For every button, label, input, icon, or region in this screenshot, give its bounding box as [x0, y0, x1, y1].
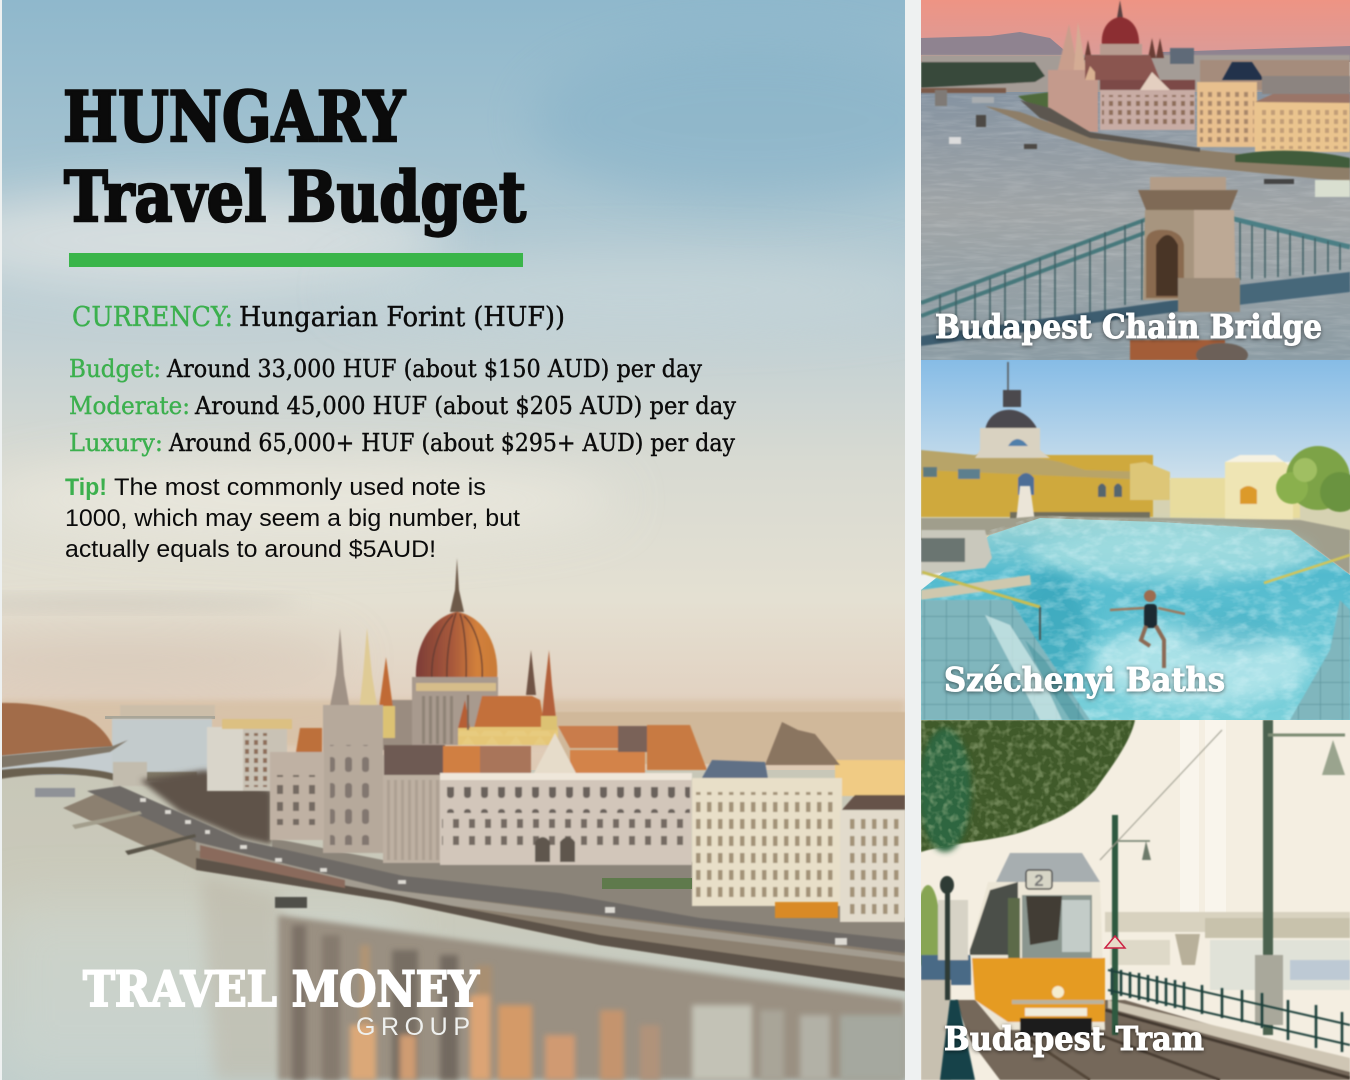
- moderate row: Moderate:: [69, 391, 190, 420]
- left towers and wings: [323, 705, 383, 853]
- yellow bath building: [921, 450, 1170, 520]
- roof: [479, 745, 532, 774]
- jetties: [35, 788, 307, 908]
- riverside buildings: [1197, 62, 1350, 152]
- left small tree and street: [916, 885, 971, 1080]
- budget row: Budget:: [69, 354, 161, 383]
- label: Széchenyi Baths: Széchenyi Baths: [944, 660, 1225, 699]
- warning sign: [1105, 936, 1125, 948]
- dark trees behind embankment: [140, 770, 272, 845]
- moderate row: Around 45,000 HUF (about $205 AUD) per day: [194, 391, 736, 420]
- track bed: [955, 1000, 1350, 1080]
- panel: main photo of Hungarian Parliament on the Danube: [0, 0, 970, 1080]
- far bank edge: [0, 740, 128, 768]
- tip text block: actually equals to around $5AUD!: [65, 536, 436, 563]
- mountains: [921, 32, 1350, 62]
- budget row: Around 33,000 HUF (about $150 AUD) per day: [166, 354, 702, 383]
- Parliament building: [270, 558, 707, 865]
- currency heading: Hungarian Forint (HUF)): [239, 302, 565, 333]
- embankment and road: [63, 786, 905, 991]
- bridge cables and deck: [921, 215, 1350, 346]
- dome: [416, 612, 497, 680]
- title: HUNGARY: [63, 77, 406, 158]
- park lawn: [602, 878, 692, 889]
- overpass: [1105, 912, 1350, 990]
- luxury row: Around 65,000+ HUF (about $295+ AUD) per day: [168, 428, 735, 457]
- teal hedge: [940, 1000, 975, 1080]
- water reflections: [200, 875, 905, 1080]
- yellow tram: [775, 902, 838, 918]
- iron fence: [1108, 968, 1350, 1052]
- arched entrance: [535, 837, 575, 862]
- central spire: [450, 558, 464, 612]
- statue: [1016, 486, 1035, 522]
- far bank with trees: [921, 48, 1350, 97]
- tip text block: The most commonly used note is: [114, 474, 486, 501]
- logo: Travel Money Group: TRAVEL MONEY: [83, 960, 480, 1018]
- upper roof: [474, 696, 545, 728]
- distant city skyline: [0, 700, 905, 775]
- river water: [0, 770, 905, 1080]
- backdrop behind buildings: [921, 480, 1350, 540]
- panel: Budapest Tram photo: [916, 720, 1350, 1080]
- terrace: [921, 516, 1350, 575]
- currency heading: [72, 302, 565, 333]
- Parliament forecourt and gardens: [272, 838, 905, 950]
- autumn trees on far bank: [0, 703, 113, 756]
- embankment: [985, 100, 1350, 182]
- bridge tower: [1130, 177, 1248, 367]
- luxury row: Luxury:: [69, 428, 163, 457]
- label: Budapest Tram: Budapest Tram: [944, 1019, 1204, 1058]
- sky: [2, 0, 905, 770]
- tiled steps: [921, 600, 1350, 720]
- lamp posts: [1100, 720, 1345, 1035]
- boats: [949, 115, 1350, 197]
- tree canopy: [919, 720, 1136, 855]
- right-hand buildings: [692, 722, 905, 922]
- tram: 2: [1034, 871, 1044, 890]
- sunset sky: [921, 0, 1350, 62]
- green title rule: [69, 253, 523, 267]
- swimmer: [1110, 590, 1185, 668]
- right pale building: [1170, 455, 1300, 520]
- tip text block: [65, 474, 520, 563]
- panel: Széchenyi Baths photo: [921, 360, 1350, 720]
- cars on road: [140, 798, 847, 945]
- street lamp: [940, 876, 954, 1000]
- main facade: [440, 773, 692, 865]
- title: Travel Budget: [64, 157, 526, 238]
- tip text block: Tip!: [65, 474, 107, 501]
- sunlit gothic band: [458, 727, 558, 745]
- strip divider: [905, 0, 921, 1080]
- near bridge: [0, 762, 197, 786]
- tram: [970, 853, 1105, 1036]
- tree: [1276, 446, 1350, 512]
- pool water: [921, 515, 1350, 720]
- riverside greenery: [1018, 92, 1050, 110]
- currency heading: CURRENCY:: [72, 302, 233, 333]
- office building: [207, 719, 292, 791]
- side gothic stone: [383, 700, 413, 750]
- logo: Travel Money Group: [83, 960, 480, 1041]
- hazy background: [921, 720, 1350, 1080]
- bridge pylons: [1180, 720, 1226, 915]
- railings and poolside: [921, 530, 1350, 640]
- pinnacles: [327, 628, 557, 738]
- sky: [921, 360, 1350, 490]
- tip text block: 1000, which may seem a big number, but: [65, 505, 520, 532]
- Parliament: [1048, 0, 1195, 132]
- budget levels list: [69, 354, 736, 457]
- title: [63, 77, 526, 238]
- river: [921, 92, 1350, 360]
- logo: Travel Money Group: GROUP: [356, 1013, 470, 1041]
- panel: Budapest Chain Bridge photo: [921, 0, 1350, 367]
- small far bridge: [921, 88, 1006, 106]
- drum: [412, 677, 498, 745]
- domed pavilion: [975, 362, 1050, 458]
